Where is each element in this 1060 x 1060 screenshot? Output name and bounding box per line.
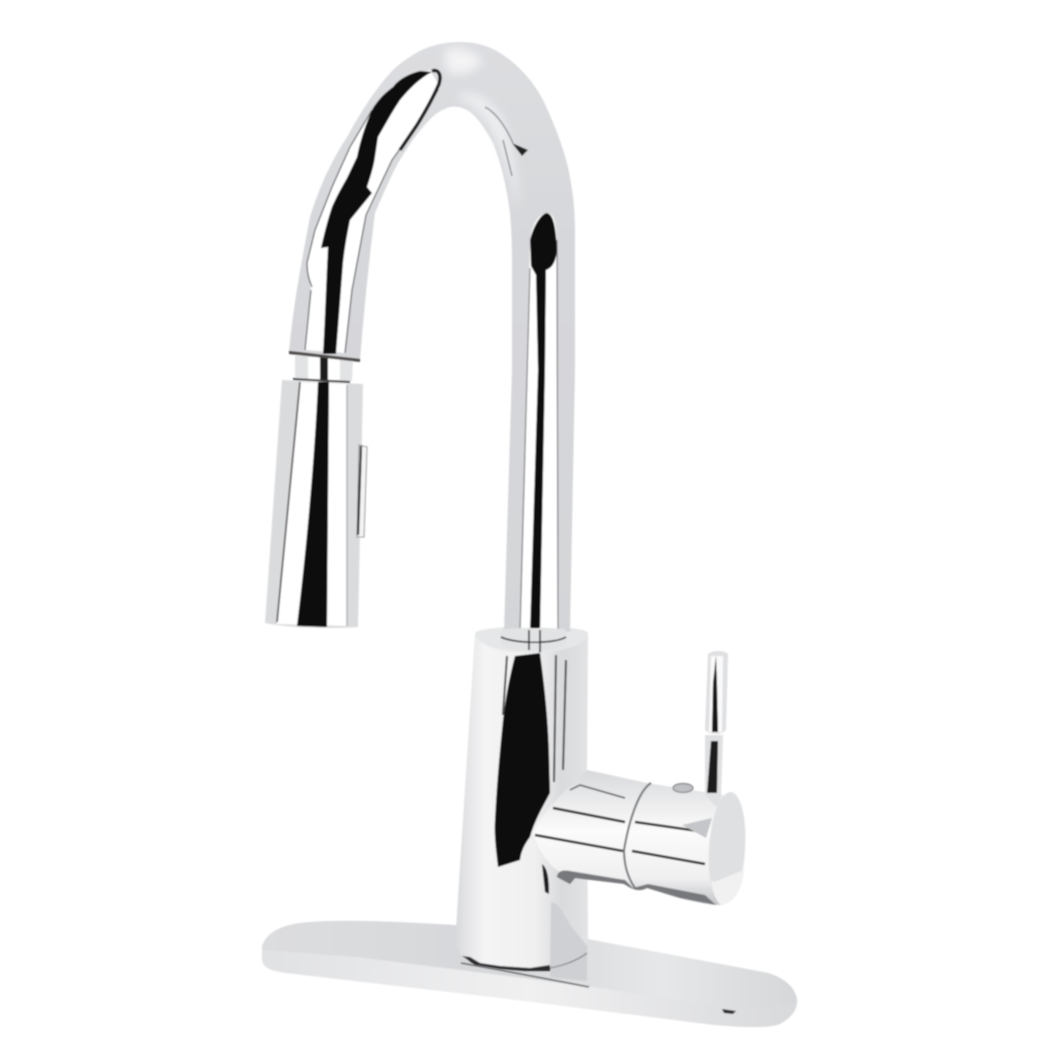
spray connector reflections [308, 357, 323, 380]
plate corner reflection [722, 1009, 736, 1014]
left arm thin outline reflections [305, 90, 438, 353]
lever set screw [673, 784, 693, 792]
plate reflection under body [550, 945, 587, 981]
faucet base body [455, 626, 588, 971]
body main dark reflection [495, 653, 550, 867]
spray head white panel [277, 382, 347, 626]
housing shell [533, 770, 745, 905]
plate front edge highlight [461, 963, 589, 987]
housing upper reflection [570, 785, 625, 798]
lever housing [533, 770, 749, 905]
spout arch and riser tube [289, 42, 575, 632]
left arm dark reflection [321, 71, 432, 354]
housing dark bands [535, 808, 705, 864]
spray toggle dark line [358, 446, 361, 535]
left arm inner dark crease [400, 71, 440, 150]
arch inner smudge reflection [485, 107, 513, 176]
riser white panel [520, 213, 558, 632]
spray connector [295, 355, 353, 381]
handle bright inner [709, 656, 723, 732]
housing under shading [557, 871, 716, 905]
body thin reflection lines [503, 655, 566, 782]
tube outer shape [289, 42, 575, 632]
end cap lower crescent [711, 870, 744, 905]
handle grip [705, 651, 728, 734]
left arm white panel [305, 70, 440, 353]
deck plate [262, 921, 797, 1027]
housing right reflection [682, 818, 712, 838]
body contact shadow [462, 956, 550, 971]
lever handle [705, 651, 728, 808]
spray head right line [346, 385, 348, 626]
plate top face [262, 921, 796, 1008]
riser dark reflection [530, 213, 557, 632]
arch inner soft highlight [455, 94, 518, 210]
spray connector ring [293, 378, 350, 383]
handle stem [705, 735, 723, 808]
spout end ring [289, 351, 360, 362]
end cap [705, 791, 749, 905]
collar ring at base of riser [501, 628, 566, 652]
pull-down spray head [265, 351, 367, 628]
plate outer shape [262, 921, 797, 1027]
body shell [455, 626, 588, 970]
handle dark reflections [712, 656, 718, 732]
collar reflections [501, 630, 566, 652]
body base arc [550, 953, 587, 968]
arch crown soft highlight [445, 49, 482, 74]
riser outer thin lines [520, 240, 558, 632]
spray head dark stripe [297, 382, 329, 627]
body top rim [475, 626, 588, 653]
spray head left line [277, 382, 300, 622]
body small lower reflection [542, 864, 549, 894]
collar band [501, 628, 566, 650]
body lower right shaded panel [550, 903, 588, 968]
housing collar seam [624, 783, 651, 888]
spray toggle tab [357, 445, 367, 537]
spray head body [265, 380, 363, 628]
